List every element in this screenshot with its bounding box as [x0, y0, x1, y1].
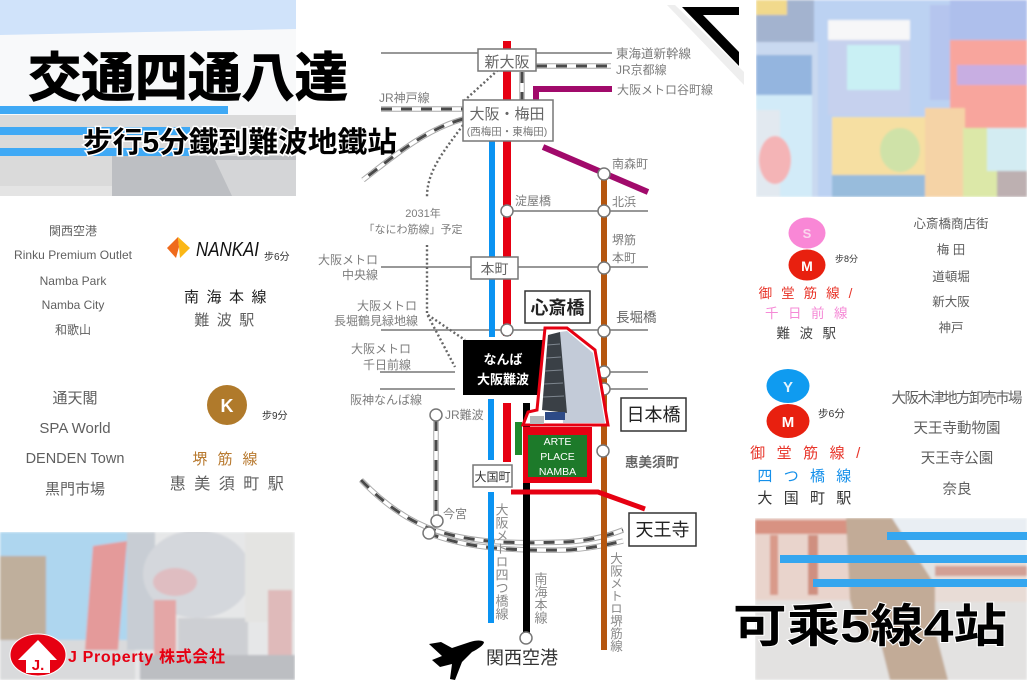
icon: M badge: M — [801, 258, 813, 274]
brown Sakaisuji line — [601, 175, 607, 650]
panel: Sakaisuji line destinations: SPA World — [39, 420, 111, 437]
station box: Daikokucho — [473, 465, 512, 487]
map line and station labels: 中央線 — [342, 267, 378, 282]
panel: Sakaisuji line destinations: 黒門市場 — [45, 481, 105, 498]
red Midosuji line — [503, 41, 511, 462]
property label: ARTE PLACE NAMBA: NAMBA — [539, 466, 576, 478]
map line and station labels: 「なにわ筋線」予定 — [364, 222, 462, 236]
station box: Honmachi — [471, 257, 518, 279]
station box: Shinsaibashi: 心斎橋 — [530, 298, 584, 318]
line name: Yotsubashi: 四つ橋線 — [757, 468, 863, 485]
map line and station labels: 淀屋橋 — [515, 194, 551, 208]
walk time: 步9分 — [262, 409, 288, 422]
station box: Shin-Osaka: 新大阪 — [484, 54, 530, 71]
map line and station labels: 南森町 — [612, 156, 648, 171]
photo: Todaiji deer bottom right — [755, 518, 1027, 680]
panel: Nankai line destinations: Namba City — [42, 298, 104, 312]
station name: 惠美須町駅 — [170, 475, 292, 493]
panel: Midosuji destinations — [913, 217, 989, 335]
panel: Midosuji destinations: 神戸 — [938, 320, 964, 335]
map line and station labels: 北浜 — [612, 195, 636, 209]
map line and station labels: 堺筋 — [612, 232, 636, 247]
panel: Midosuji and Yotsubashi station — [750, 369, 872, 507]
panel: Yotsubashi destinations: 奈良 — [942, 481, 972, 498]
icon: S badge: S — [803, 226, 812, 241]
panel: Sakaisuji line destinations — [26, 390, 124, 498]
green Namba marker — [515, 422, 522, 455]
vertical line labels: 大阪メトロ堺筋線 — [608, 552, 622, 652]
station box: Osaka Umeda — [463, 100, 553, 141]
label: Kansai Airport: 関西空港 — [486, 648, 558, 668]
panel: Yotsubashi destinations — [892, 390, 1022, 498]
Naniwasuji planned dotted line — [427, 70, 498, 367]
station box: Honmachi: 本町 — [480, 261, 508, 277]
panel: Midosuji destinations: 梅 田 — [937, 243, 965, 257]
magenta Tanimachi line — [536, 89, 648, 192]
station box: Tennoji — [629, 513, 696, 546]
panel: Midosuji and Sennichimae station — [759, 218, 861, 341]
panel: Midosuji destinations: 新大阪 — [932, 295, 970, 309]
JR railway lines — [361, 66, 623, 550]
vertical line labels: 大阪メトロ四つ橋線 — [494, 503, 508, 620]
icon: airplane — [429, 640, 484, 680]
panel: Sakaisuji line station — [170, 385, 292, 493]
map line and station labels — [318, 46, 713, 521]
company name: J Property 株式会社 — [68, 648, 225, 666]
panel: Midosuji destinations: 心斎橋商店街 — [913, 217, 989, 231]
icon: M badge: M — [782, 414, 794, 431]
map line and station labels: 大阪メトロ — [351, 342, 411, 356]
icon: Y badge: Y — [783, 379, 793, 396]
station box: Tennoji: 天王寺 — [636, 520, 690, 540]
map line and station labels: 長堀鶴見緑地線 — [334, 313, 418, 328]
panel: Nankai line destinations — [14, 224, 133, 337]
title: 交通四通八達 — [28, 49, 348, 108]
route map — [318, 5, 744, 680]
map line and station labels: 大阪メトロ谷町線 — [617, 82, 713, 97]
station circles — [423, 168, 610, 644]
corner arrow — [667, 5, 744, 85]
building: Arte Place Namba — [523, 328, 608, 425]
map line and station labels: 大阪メトロ — [318, 253, 378, 267]
map line and station labels: 大阪メトロ — [357, 299, 417, 313]
station name: 難波駅 — [776, 326, 846, 341]
photo: Shinsekai street bottom left — [0, 530, 295, 680]
station box: Namba: 大阪難波 — [477, 372, 529, 387]
decorative blue bars top left — [0, 106, 228, 156]
walk time: 步8分 — [835, 253, 858, 264]
station box: Nipponbashi — [621, 398, 686, 431]
panel: Nankai line destinations: Rinku Premium Outlet — [14, 248, 133, 262]
subtitle: 步行5分鐵到難波地鐵站 — [83, 126, 397, 159]
line name: 堺筋線 — [192, 451, 268, 468]
vertical line labels — [494, 503, 622, 652]
icon: J house: J. — [32, 657, 44, 674]
walk time: 步6分 — [818, 407, 845, 420]
icon: Nankai logo — [167, 237, 190, 258]
panel: Nankai line destinations: 和歌山 — [55, 323, 91, 337]
Nankai wordmark: NANKAI — [196, 239, 259, 261]
station box: Namba — [463, 340, 545, 395]
panel: Sakaisuji line destinations: 通天閣 — [52, 390, 98, 407]
map line and station labels: 今宮 — [443, 506, 467, 521]
map line and station labels: 2031年 — [405, 206, 441, 220]
panel: Yotsubashi destinations: 大阪木津地方卸売市場 — [892, 390, 1022, 407]
map line and station labels: 千日前線 — [363, 357, 411, 372]
line name: Sennichimae: 千日前線 — [765, 305, 857, 321]
company logo — [10, 634, 225, 676]
map line and station labels: 惠美須町 — [625, 454, 679, 470]
photo: Dotonbori signs top right — [756, 0, 1027, 197]
map line and station labels: 長堀橋 — [616, 310, 657, 325]
panel: Nankai line destinations: Namba Park — [40, 274, 107, 288]
map line and station labels: JR難波 — [445, 407, 484, 422]
property label: ARTE PLACE NAMBA: PLACE — [540, 451, 575, 463]
station name: 大国町駅 — [757, 490, 863, 507]
photo: station top left — [0, 0, 296, 196]
panel: Yotsubashi destinations: 天王寺動物園 — [914, 420, 1000, 437]
line name: Midosuji: 御堂筋線/ — [750, 445, 872, 462]
line name: Midosuji: 御堂筋線/ — [759, 285, 861, 301]
map line and station labels: 東海道新幹線 — [616, 46, 692, 61]
black Nankai line — [523, 403, 530, 633]
property label: ARTE PLACE NAMBA: ARTE — [544, 436, 571, 448]
map line and station labels: 阪神なんば線 — [350, 392, 422, 407]
panel: Nankai line destinations: 関西空港 — [49, 224, 97, 238]
thin station cross lines — [380, 53, 648, 389]
panel: Nankai line station — [167, 237, 290, 329]
decorative blue bars bottom right — [780, 532, 1027, 587]
walk time: 步6分 — [264, 250, 290, 263]
red Tennoji connector — [511, 492, 645, 509]
station box: Osaka Umeda: (西梅田・東梅田) — [467, 125, 547, 138]
property label: ARTE PLACE NAMBA — [523, 427, 592, 483]
station box: Daikokucho: 大国町 — [474, 470, 511, 484]
panel: Yotsubashi destinations: 天王寺公園 — [921, 450, 993, 467]
icon: K badge: K — [220, 396, 234, 416]
station name: 難波駅 — [194, 312, 262, 329]
bottom right heading: 可乘5線4站 — [733, 600, 1007, 652]
station box: Shin-Osaka — [478, 49, 536, 71]
icon: J house — [10, 634, 66, 676]
map line and station labels: JR京都線 — [616, 62, 667, 77]
vertical line labels: 南海本線 — [532, 571, 548, 624]
station box: Nipponbashi: 日本橋 — [626, 405, 680, 425]
station box: Namba: なんば — [483, 352, 523, 367]
blue Yotsubashi line — [488, 141, 495, 623]
line name: 南海本線 — [184, 289, 274, 306]
panel: Sakaisuji line destinations: DENDEN Town — [26, 451, 124, 467]
map line and station labels: JR神戸線 — [379, 90, 430, 105]
panel: Midosuji destinations: 道頓堀 — [932, 269, 970, 284]
station box: Osaka Umeda: 大阪・梅田 — [469, 106, 545, 123]
station box: Shinsaibashi — [525, 291, 590, 323]
map line and station labels: 本町 — [612, 251, 636, 265]
